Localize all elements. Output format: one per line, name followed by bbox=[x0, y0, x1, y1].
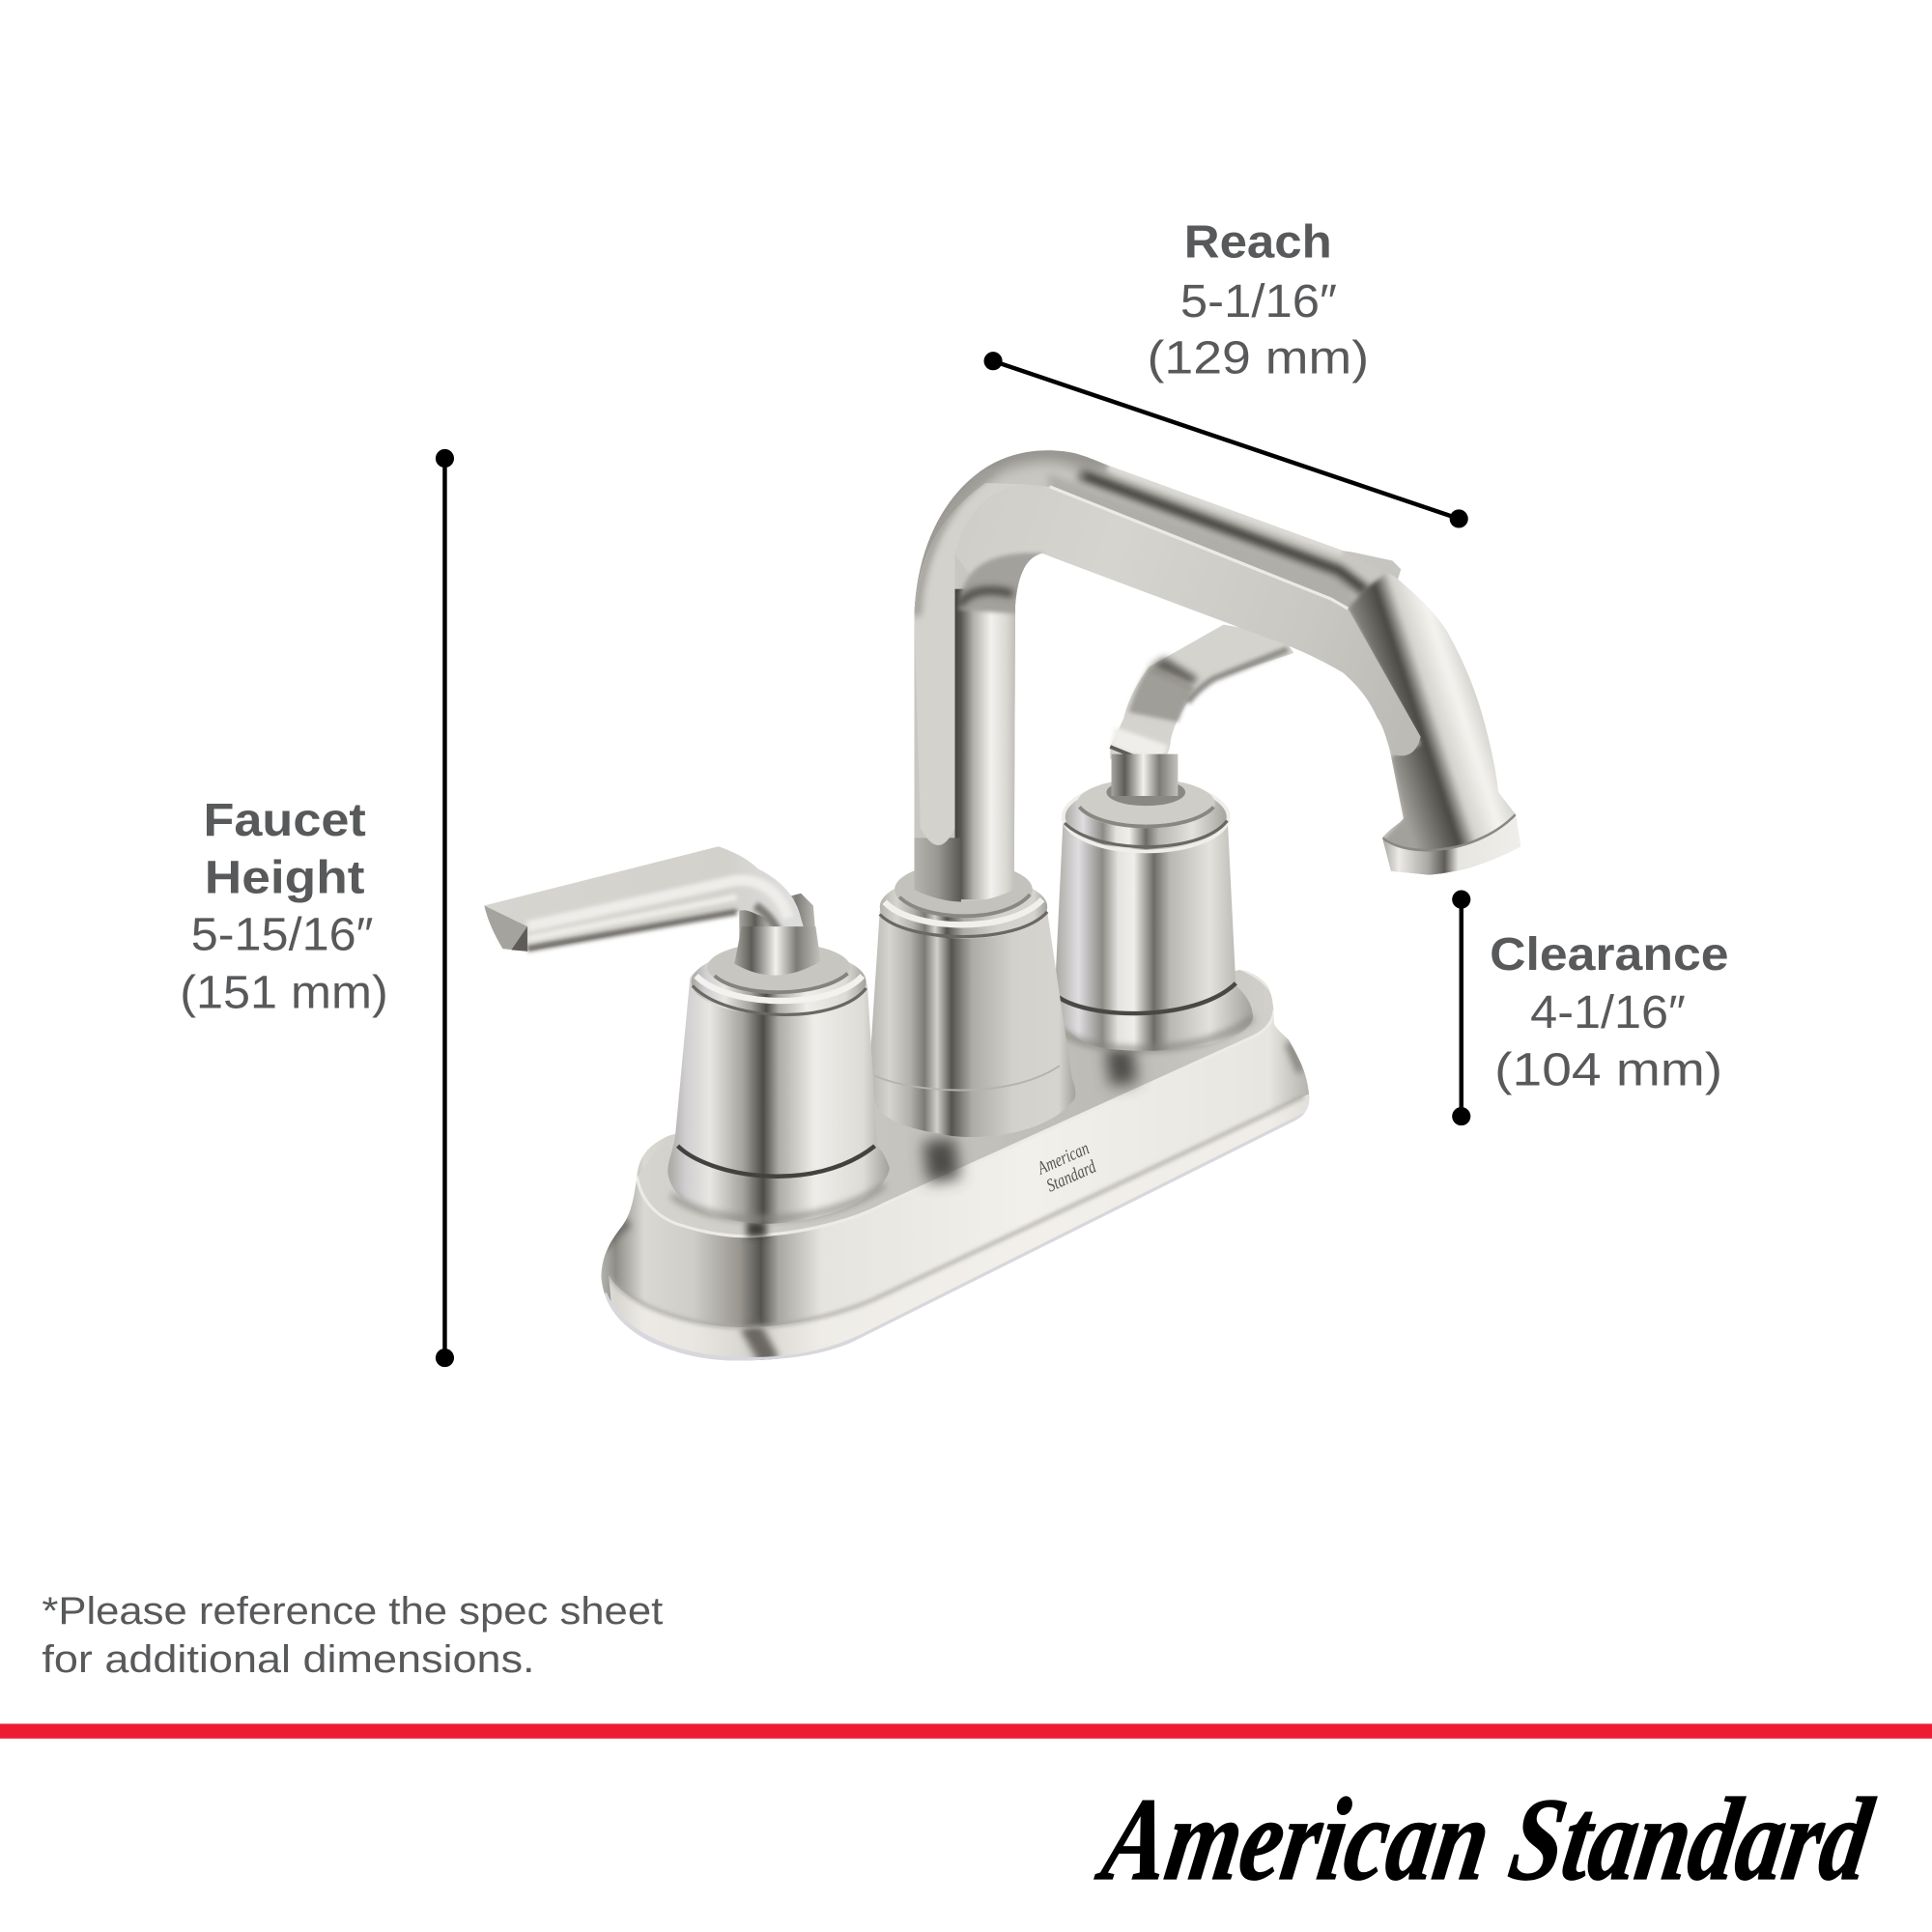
right knob body bbox=[1055, 787, 1253, 1051]
label: faucet height: Height bbox=[205, 852, 365, 904]
faucet deck plate bbox=[601, 970, 1319, 1368]
label: clearance: Clearance bbox=[1490, 928, 1729, 980]
faucet brand mark: Standard bbox=[1043, 1156, 1099, 1197]
right lever bbox=[1110, 625, 1293, 766]
left knob body bbox=[668, 957, 890, 1224]
label: faucet height: 5-15/16″ bbox=[191, 908, 373, 960]
arch shading bbox=[914, 450, 1109, 616]
faucet spout bbox=[914, 450, 1520, 902]
red divider bar bbox=[0, 1723, 1932, 1739]
label: clearance: (104 mm) bbox=[1494, 1044, 1722, 1096]
label: reach: Reach bbox=[1184, 216, 1332, 269]
riser left face bbox=[914, 838, 961, 902]
label: faucet height: (151 mm) bbox=[180, 966, 388, 1018]
faucet center body bbox=[868, 863, 1075, 1137]
spout flare bbox=[1382, 816, 1520, 875]
footnote: for additional dimensions. bbox=[42, 1638, 535, 1681]
label: reach bbox=[1148, 216, 1369, 384]
label: faucet height: Faucet bbox=[203, 794, 366, 846]
dimension line: reach bbox=[983, 352, 1468, 528]
label: clearance: 4-1/16″ bbox=[1530, 986, 1686, 1038]
left lever bbox=[484, 846, 813, 961]
faucet illustration bbox=[484, 431, 1540, 1368]
label: reach: (129 mm) bbox=[1148, 331, 1369, 384]
faucet brand mark bbox=[1034, 1138, 1100, 1198]
left knob stem bbox=[739, 894, 818, 972]
faucet left handle bbox=[484, 846, 890, 1224]
right bend bbox=[1349, 574, 1515, 875]
label: reach: 5-1/16″ bbox=[1180, 275, 1337, 327]
faucet right handle bbox=[1055, 625, 1293, 1051]
dimension line: faucet height bbox=[436, 449, 454, 1367]
flat front face bbox=[955, 484, 1421, 755]
label: clearance bbox=[1490, 928, 1729, 1096]
faucet brand mark: American bbox=[1034, 1138, 1093, 1179]
dimension line: clearance bbox=[1452, 891, 1470, 1125]
label: faucet height bbox=[180, 794, 388, 1018]
footnote: *Please reference the spec sheet bbox=[42, 1590, 663, 1633]
footnote bbox=[42, 1590, 663, 1681]
riser tube bbox=[955, 589, 1016, 899]
